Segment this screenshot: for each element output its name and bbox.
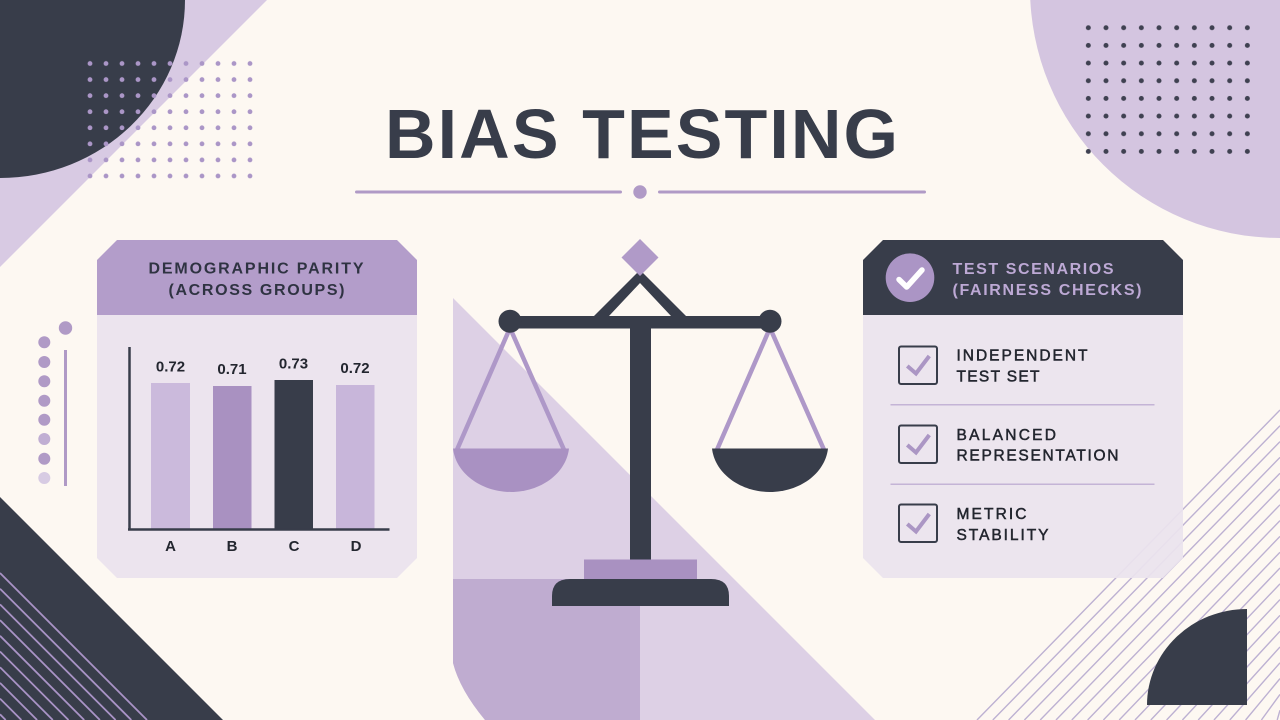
divider [890,484,1154,485]
check item: balanced representation [899,426,1118,464]
decoration: bottom-left striped triangle [0,497,223,720]
panel heading: TEST SCENARIOS [952,261,1114,278]
panel body [863,315,1183,578]
bar chart [128,347,390,555]
title: BIAS TESTING [385,95,898,173]
check item: independent test set: TEST SET [956,368,1040,386]
check item: balanced representation: BALANCED [956,427,1056,444]
icon: check circle [886,253,934,302]
decoration: bottom-right stripes [977,410,1280,720]
divider [890,404,1154,406]
scale right pan chains [716,328,825,452]
panel heading: (ACROSS GROUPS) [168,282,344,299]
bar chart: 0.72 [156,359,185,376]
panel heading: (FAIRNESS CHECKS) [952,282,1142,299]
decoration: top-left shapes [0,0,267,267]
scale left pan chains [456,328,565,452]
decoration: left dot column [38,321,72,486]
scale frame [594,270,686,316]
bar chart: 0.72 [340,360,370,377]
panel header [863,240,1183,315]
check item: metric stability [899,504,1048,544]
bar chart: C [289,538,300,555]
scale right pan [712,448,828,492]
scale left pan [453,448,569,492]
title divider [355,185,926,199]
panel: demographic parity [97,240,417,578]
scale diamond [622,239,658,276]
panel: test scenarios [863,240,1183,578]
decoration: dark quarter circle [1147,609,1247,705]
scale riser [584,560,697,580]
scale base [552,579,729,606]
panel body [97,315,417,578]
panel header [97,240,417,315]
decoration: central backdrop shape [453,298,883,720]
panel heading [952,261,1142,299]
icon: balance scale [453,239,828,606]
panel heading [148,260,364,299]
check item: metric stability: METRIC [956,506,1026,523]
check item: metric stability: STABILITY [956,527,1048,544]
bar chart: A [165,538,176,555]
check item: independent test set [899,346,1088,386]
panel heading: DEMOGRAPHIC PARITY [148,260,364,277]
bar chart: 0.71 [217,361,247,378]
bar chart: D [351,538,362,555]
bar chart: B [227,538,238,555]
scale beam and post [498,310,782,560]
check item: balanced representation: REPRESENTATION [956,448,1118,464]
decoration: top-right circle with dots [1030,0,1280,238]
bar chart: 0.73 [279,356,308,372]
check item: independent test set: INDEPENDENT [956,348,1088,364]
